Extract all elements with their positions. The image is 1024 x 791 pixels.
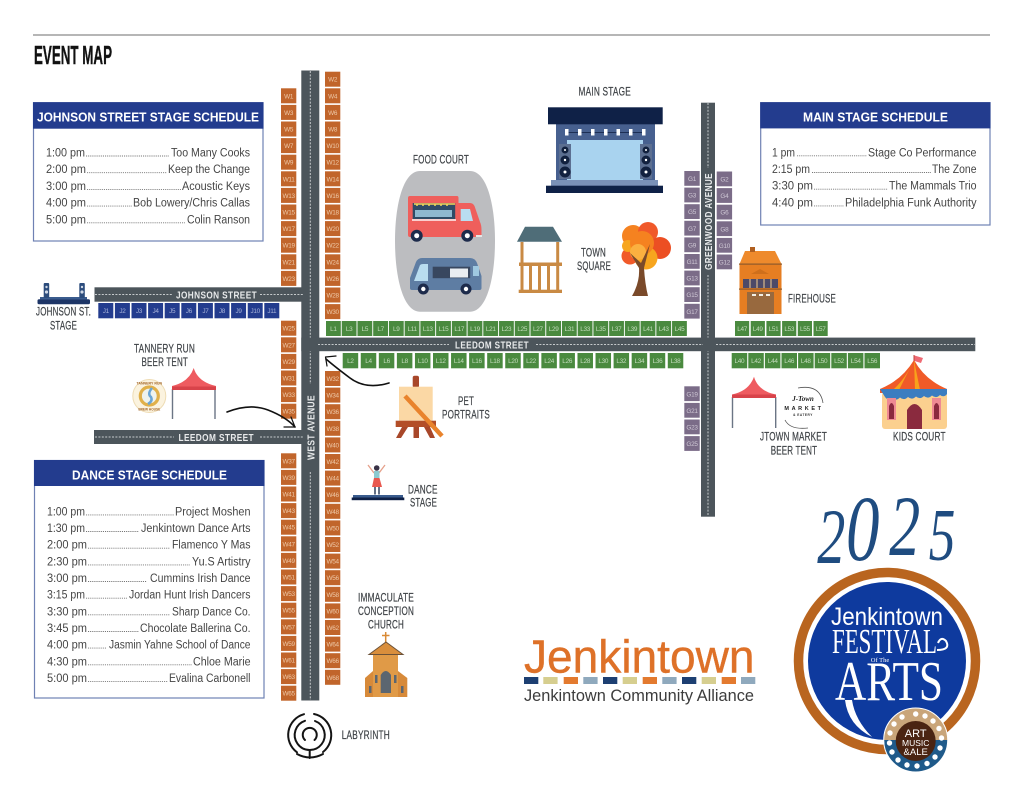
stalls: West Avenue W2 to W30: W10 <box>326 143 339 150</box>
icon: dancer on stage <box>352 465 404 500</box>
arrow: to pet portraits <box>326 356 389 386</box>
stalls: Leedom Street L1 to L45: L5 <box>362 326 369 333</box>
icon: red food truck <box>408 196 482 242</box>
icon: Tannery Run tent <box>172 368 216 419</box>
label: Dance stage <box>408 482 438 510</box>
stalls: West Avenue W32 to W68: W64 <box>326 642 339 649</box>
stalls: Leedom Street L1 to L45 <box>326 321 687 336</box>
stalls: Leedom Street L1 to L45: L15 <box>439 326 449 333</box>
road: West Avenue <box>301 70 319 700</box>
stalls: Leedom Street L2 to L38: L32 <box>616 358 627 365</box>
stalls: Leedom Street L1 to L45: L7 <box>377 326 385 333</box>
stalls: Leedom Street L47 to L57: L47 <box>737 326 748 333</box>
schedule rows: Keep the Change <box>168 164 250 176</box>
stalls: West Avenue W2 to W30: W14 <box>326 176 339 183</box>
icon: Tannery Run logo: TANNERY RUN <box>136 382 163 386</box>
stalls: Leedom Street L40 to L56: L50 <box>818 358 828 365</box>
schedule rows: Project Moshen <box>175 506 250 518</box>
stalls: Leedom Street L2 to L38: L8 <box>401 358 409 365</box>
schedule rows: Too Many Cooks <box>171 148 250 160</box>
stalls: Leedom Street L1 to L45: L29 <box>549 326 559 333</box>
schedule rows: Evalina Carbonell <box>169 673 250 685</box>
stalls: West Avenue W2 to W30 <box>325 72 340 319</box>
stalls: Johnson Street J1 to J11: J11 <box>267 308 277 315</box>
schedule rows: Chloe Marie <box>193 656 250 668</box>
label: Tannery Run beer tent: TANNERY RUN <box>134 342 195 356</box>
schedule rows: 5:00 pm <box>47 673 87 685</box>
stalls: Leedom Street L2 to L38: L2 <box>347 358 354 365</box>
stalls: West Avenue W37 to W65: W37 <box>282 458 295 465</box>
stalls: West Avenue W37 to W65: W63 <box>282 674 295 681</box>
stalls: Johnson Street J1 to J11: J7 <box>202 308 209 315</box>
stalls: West Avenue W37 to W65: W41 <box>282 491 295 498</box>
stalls: Leedom Street L40 to L56: L54 <box>851 358 861 365</box>
stalls: Leedom Street L2 to L38: L4 <box>365 358 372 365</box>
stalls: Leedom Street L2 to L38 <box>343 353 683 368</box>
stalls: West Avenue W25 to W35: W27 <box>282 342 295 349</box>
stalls: Leedom Street L1 to L45: L9 <box>393 326 400 333</box>
stalls: Greenwood G1 to G17: G1 <box>688 176 697 183</box>
stalls: West Avenue W2 to W30: W22 <box>326 243 339 250</box>
stalls: Johnson Street J1 to J11 <box>98 303 279 318</box>
road: Leedom Street west <box>94 430 303 444</box>
stalls: Greenwood G19 to G25: G19 <box>686 391 698 398</box>
stalls: Leedom Street L1 to L45: L35 <box>596 326 606 333</box>
schedule rows: Acoustic Keys <box>182 181 250 193</box>
icon: JTown tent <box>732 377 776 428</box>
label: Kids court: KIDS COURT <box>893 430 946 444</box>
schedule rows: 4:30 pm <box>47 656 87 668</box>
schedule rows: 4:00 pm <box>46 198 86 210</box>
schedule rows: Philadelphia Funk Authority <box>845 197 977 209</box>
icon: Tannery Run logo <box>133 380 166 412</box>
stalls: Greenwood G2 to G12: G12 <box>719 260 731 266</box>
road: Greenwood Avenue: GREENWOOD AVENUE <box>703 173 715 270</box>
label: Immaculate Conception Church <box>358 591 414 631</box>
label: Dance stage: DANCE <box>408 482 438 496</box>
heading: Johnson schedule: JOHNSON STREET STAGE SCHEDULE <box>37 110 259 124</box>
stalls: Leedom Street L1 to L45: L43 <box>659 326 669 333</box>
panel: Food court area <box>395 171 495 312</box>
stalls: West Avenue W1 to W23: W21 <box>282 259 295 266</box>
schedule rows: 2:15 pm <box>772 164 810 176</box>
stalls: West Avenue W37 to W65 <box>281 453 296 701</box>
schedule rows: Flamenco Y Mas <box>172 540 251 552</box>
label: Labyrinth: LABYRINTH <box>342 728 390 742</box>
stalls: Leedom Street L2 to L38: L26 <box>562 358 573 365</box>
logo: Jenkintown Festival of the Arts <box>798 572 976 772</box>
stalls: Leedom Street L1 to L45: L21 <box>486 326 496 333</box>
stalls: West Avenue W37 to W65: W57 <box>282 624 295 631</box>
icon: firehouse <box>739 247 782 314</box>
stalls: West Avenue W2 to W30: W30 <box>326 309 339 316</box>
schedule rows: The Zone <box>932 164 976 176</box>
year: 2025: 2 <box>817 493 845 580</box>
schedule rows: 3:30 pm <box>47 606 87 618</box>
title: EVENT MAP <box>34 40 112 70</box>
stalls: Johnson Street J1 to J11: J2 <box>119 308 126 315</box>
stalls: Leedom Street L1 to L45: L19 <box>470 326 481 333</box>
label: Tannery Run beer tent <box>134 342 195 369</box>
stalls: West Avenue W32 to W68: W50 <box>326 525 339 532</box>
schedule rows: 2:00 pm <box>47 540 87 552</box>
stalls: West Avenue W37 to W65: W53 <box>282 591 295 598</box>
icon: kids court circus tent <box>880 355 947 429</box>
stalls: Leedom Street L40 to L56: L52 <box>834 358 845 365</box>
year: 2025: 2 <box>889 479 920 575</box>
stalls: Leedom Street L47 to L57: L55 <box>800 326 811 333</box>
stalls: Johnson Street J1 to J11: J6 <box>186 308 193 315</box>
schedule rows: 3:45 pm <box>47 623 87 635</box>
schedule rows: The Mammals Trio <box>889 181 976 193</box>
icon: Johnson St. stage <box>38 283 90 304</box>
road: Johnson Street <box>94 287 303 302</box>
stalls: West Avenue W32 to W68: W52 <box>326 542 339 549</box>
stalls: Greenwood G19 to G25: G23 <box>686 424 698 431</box>
icon: church <box>365 632 407 697</box>
stalls: West Avenue W32 to W68: W54 <box>326 559 339 566</box>
stalls: West Avenue W32 to W68: W38 <box>326 426 339 433</box>
schedule rows: 1:00 pm <box>46 148 85 160</box>
label: Pet portraits: PET <box>458 394 474 408</box>
stalls: Leedom Street L2 to L38: L10 <box>418 358 428 365</box>
stalls: West Avenue W37 to W65: W47 <box>282 541 295 548</box>
road: Leedom Street: LEEDOM STREET <box>455 339 529 351</box>
stalls: West Avenue W2 to W30: W28 <box>326 292 339 300</box>
stalls: West Avenue W1 to W23: W7 <box>284 143 294 150</box>
label: Pet portraits: PORTRAITS <box>442 408 490 422</box>
label: Johnson St. stage: STAGE <box>50 318 77 332</box>
stalls: West Avenue W2 to W30: W6 <box>328 110 338 117</box>
schedule rows: Stage Co Performance <box>868 147 976 159</box>
stalls: West Avenue W1 to W23: W13 <box>282 193 295 200</box>
stalls: West Avenue W32 to W68: W56 <box>326 575 339 582</box>
stalls: West Avenue W1 to W23 <box>281 88 296 286</box>
schedule rows: 1:00 pm <box>47 506 85 518</box>
badge: art music and ale <box>884 708 948 772</box>
stalls: Greenwood G19 to G25 <box>684 386 700 451</box>
stalls: Leedom Street L2 to L38: L14 <box>454 358 464 365</box>
stalls: West Avenue W2 to W30: W2 <box>328 77 338 84</box>
stalls: Leedom Street L1 to L45: L37 <box>612 326 622 333</box>
stalls: Leedom Street L2 to L38: L20 <box>508 358 519 365</box>
label: Town square: SQUARE <box>577 259 611 273</box>
stalls: Greenwood G1 to G17: G7 <box>688 226 697 233</box>
schedule rows: 4:40 pm <box>772 197 813 209</box>
stalls: West Avenue W2 to W30: W26 <box>326 276 339 283</box>
stalls: Greenwood G2 to G12: G2 <box>720 176 729 184</box>
label: Johnson St. stage: JOHNSON ST. <box>36 305 91 319</box>
stalls: Leedom Street L40 to L56: L44 <box>768 358 778 365</box>
stalls: Leedom Street L2 to L38: L18 <box>490 358 501 365</box>
stalls: Johnson Street J1 to J11: J4 <box>153 308 159 315</box>
stalls: West Avenue W32 to W68 <box>325 371 340 685</box>
logo: Jenkintown Festival of the Arts: FESTIVAL <box>832 622 937 661</box>
schedule rows: Jenkintown Dance Arts <box>141 523 251 535</box>
label: Pet portraits <box>442 394 490 422</box>
schedule rows: Yu.S Artistry <box>192 556 251 568</box>
icon: J-Town Market logo: MARKET <box>784 406 824 412</box>
stalls: West Avenue W32 to W68: W36 <box>326 409 339 416</box>
label: Food court: FOOD COURT <box>413 152 469 166</box>
road: Leedom Street <box>301 338 975 351</box>
stalls: West Avenue W1 to W23: W15 <box>282 210 295 216</box>
logo: Jenkintown Festival of the Arts: ARTS <box>835 651 943 713</box>
stalls: Leedom Street L2 to L38: L22 <box>526 358 537 365</box>
stalls: Johnson Street J1 to J11: J3 <box>136 308 143 315</box>
icon: J-Town Market logo: J-Town <box>791 395 814 403</box>
stalls: Leedom Street L2 to L38: L30 <box>598 358 609 365</box>
stalls: Leedom Street L2 to L38: L36 <box>653 358 663 365</box>
schedule rows <box>772 147 977 209</box>
stalls: West Avenue W1 to W23: W1 <box>284 93 294 100</box>
colored square strip <box>524 677 755 684</box>
stalls: West Avenue W2 to W30: W24 <box>326 259 339 266</box>
stalls: Leedom Street L40 to L56 <box>732 353 880 368</box>
schedule rows: 3:15 pm <box>47 590 85 602</box>
stalls: West Avenue W25 to W35: W35 <box>282 409 295 416</box>
badge: art music and ale: MUSIC <box>902 738 929 748</box>
stalls: West Avenue W37 to W65: W49 <box>282 558 295 565</box>
label: JTown Market beer tent: BEER TENT <box>771 443 817 457</box>
stalls: Leedom Street L2 to L38: L38 <box>671 358 681 365</box>
label: Tannery Run beer tent: BEER TENT <box>142 355 188 369</box>
stalls: Leedom Street L40 to L56: L42 <box>751 358 762 365</box>
stalls: Leedom Street L1 to L45: L25 <box>517 326 528 333</box>
stalls: West Avenue W32 to W68: W66 <box>326 658 339 665</box>
label: Dance stage: STAGE <box>410 496 437 510</box>
stalls: West Avenue W2 to W30: W12 <box>326 160 339 167</box>
stalls: Leedom Street L2 to L38: L12 <box>436 358 446 365</box>
stalls: West Avenue W32 to W68: W62 <box>326 625 339 632</box>
stalls: Greenwood G1 to G17: G3 <box>688 193 697 200</box>
stalls: Johnson Street J1 to J11: J10 <box>250 308 261 315</box>
stalls: Greenwood G1 to G17 <box>684 171 700 319</box>
heading: Dance schedule: DANCE STAGE SCHEDULE <box>72 468 227 482</box>
stalls: West Avenue W37 to W65: W51 <box>282 574 295 581</box>
road: Johnson Street: JOHNSON STREET <box>176 289 257 301</box>
label: Main stage: MAIN STAGE <box>578 85 631 99</box>
schedule rows: Colin Ranson <box>187 214 250 226</box>
stalls: Leedom Street L2 to L38: L6 <box>383 358 391 365</box>
schedule rows: 1:30 pm <box>47 523 85 535</box>
stalls: West Avenue W37 to W65: W55 <box>282 608 295 615</box>
stalls: Greenwood G1 to G17: G9 <box>688 242 697 249</box>
stalls: Greenwood G19 to G25: G21 <box>686 408 698 415</box>
stalls: Leedom Street L2 to L38: L16 <box>472 358 483 365</box>
label: JTown Market beer tent: JTOWN MARKET <box>760 430 827 444</box>
icon: main stage <box>546 107 663 193</box>
stalls: Leedom Street L40 to L56: L46 <box>784 358 795 365</box>
schedule rows: Jasmin Yahne School of Dance <box>109 640 250 652</box>
road: West Avenue: WEST AVENUE <box>305 395 317 460</box>
stalls: West Avenue W37 to W65: W43 <box>282 508 295 515</box>
stalls: Leedom Street L47 to L57: L49 <box>753 326 763 333</box>
stalls: Greenwood G19 to G25: G25 <box>686 441 698 448</box>
icon: J-Town Market logo: & EATERY <box>793 413 813 417</box>
label: Town square <box>577 246 611 273</box>
heading: Main schedule: MAIN STAGE SCHEDULE <box>803 110 948 124</box>
year: 2025: 5 <box>929 495 955 576</box>
stalls: West Avenue W1 to W23: W17 <box>282 226 295 233</box>
schedule rows: 3:30 pm <box>772 181 813 193</box>
schedule rows: 5:00 pm <box>46 214 86 226</box>
stalls: West Avenue W1 to W23: W23 <box>282 276 295 283</box>
stalls: West Avenue W2 to W30: W16 <box>326 193 339 200</box>
schedule rows: Jordan Hunt Irish Dancers <box>129 590 251 602</box>
stalls: West Avenue W37 to W65: W39 <box>282 475 295 482</box>
arrow: to Leedom Street <box>227 407 295 427</box>
stalls: Leedom Street L1 to L45: L13 <box>423 326 433 333</box>
stalls: West Avenue W32 to W68: W58 <box>326 592 339 599</box>
stalls: West Avenue W1 to W23: W5 <box>284 127 294 134</box>
stalls: Leedom Street L47 to L57 <box>735 321 828 336</box>
stalls: West Avenue W2 to W30: W20 <box>326 226 339 233</box>
stalls: Greenwood G2 to G12 <box>717 172 732 269</box>
stalls: Greenwood G2 to G12: G8 <box>720 226 729 233</box>
icon: easel and pencil <box>396 376 442 438</box>
label: Immaculate Conception Church: IMMACULATE <box>358 591 414 605</box>
road: Greenwood Avenue <box>701 103 715 517</box>
label: Town square: TOWN <box>581 246 606 260</box>
label: Johnson St. stage <box>36 305 91 332</box>
stalls: Leedom Street L1 to L45: L11 <box>407 326 417 333</box>
stalls: Leedom Street L40 to L56: L48 <box>801 358 811 365</box>
panel: Main stage schedule <box>760 102 990 225</box>
label: Immaculate Conception Church: CHURCH <box>368 617 404 631</box>
stalls: Leedom Street L1 to L45: L1 <box>330 326 337 333</box>
stalls: West Avenue W25 to W35: W31 <box>282 376 295 383</box>
stalls: Leedom Street L2 to L38: L28 <box>580 358 591 365</box>
label: Immaculate Conception Church: CONCEPTION <box>358 604 414 618</box>
stalls: Leedom Street L1 to L45: L39 <box>627 326 638 333</box>
stalls: West Avenue W2 to W30: W18 <box>326 210 339 216</box>
schedule rows: Cummins Irish Dance <box>150 573 250 585</box>
stalls: Johnson Street J1 to J11: J8 <box>219 308 226 315</box>
stalls: West Avenue W1 to W23: W9 <box>284 160 294 167</box>
stalls: Johnson Street J1 to J11: J1 <box>103 308 110 315</box>
stalls: Leedom Street L40 to L56: L40 <box>735 358 745 365</box>
stalls: West Avenue W25 to W35 <box>281 321 296 419</box>
schedule rows: 3:00 pm <box>46 181 86 193</box>
stalls: West Avenue W32 to W68: W32 <box>326 376 339 383</box>
stalls: Leedom Street L1 to L45: L41 <box>643 326 654 333</box>
schedule rows: 2:00 pm <box>46 164 86 176</box>
stalls: Leedom Street L1 to L45: L27 <box>533 326 544 333</box>
schedule rows: 2:30 pm <box>47 556 87 568</box>
stalls: Johnson Street J1 to J11: J9 <box>236 308 242 315</box>
stalls: Leedom Street L1 to L45: L33 <box>580 326 591 333</box>
badge: art music and ale: &ALE <box>904 747 928 758</box>
icon: labyrinth <box>288 714 331 758</box>
stalls: Greenwood G1 to G17: G17 <box>686 309 698 316</box>
stalls: West Avenue W2 to W30: W8 <box>328 126 338 133</box>
schedule rows: 1 pm <box>772 147 795 159</box>
stalls: Leedom Street L40 to L56: L56 <box>867 358 878 365</box>
logo: Jenkintown Community Alliance <box>524 630 755 705</box>
badge: art music and ale: ART <box>905 728 927 740</box>
stalls: West Avenue W37 to W65: W45 <box>282 525 295 532</box>
icon: J-Town Market logo <box>784 387 824 428</box>
schedule rows: 3:00 pm <box>47 573 87 585</box>
stalls: West Avenue W25 to W35: W33 <box>282 392 295 399</box>
stalls: Greenwood G2 to G12: G10 <box>719 243 731 250</box>
stalls: Greenwood G2 to G12: G4 <box>720 193 729 200</box>
stalls: Leedom Street L1 to L45: L17 <box>454 326 465 333</box>
logo: Jenkintown Community Alliance: Jenkintown Community Alliance <box>524 686 754 705</box>
label: JTown Market beer tent <box>760 430 827 457</box>
year: 2025: 0 <box>846 477 879 581</box>
panel: Dance stage schedule <box>34 460 264 698</box>
stalls: Leedom Street L1 to L45: L23 <box>502 326 512 333</box>
stalls: Greenwood G1 to G17: G13 <box>686 276 698 283</box>
stalls: Leedom Street L1 to L45: L3 <box>346 326 353 333</box>
stalls: Leedom Street L2 to L38: L34 <box>635 358 645 365</box>
stalls: Greenwood G2 to G12: G6 <box>720 210 729 217</box>
stalls: West Avenue W25 to W35: W25 <box>282 326 295 333</box>
stalls: West Avenue W32 to W68: W40 <box>326 442 339 449</box>
stalls: West Avenue W32 to W68: W44 <box>326 476 339 483</box>
stalls: West Avenue W37 to W65: W59 <box>282 641 295 648</box>
stalls: West Avenue W32 to W68: W34 <box>326 393 339 400</box>
stalls: Johnson Street J1 to J11: J5 <box>169 308 176 315</box>
stalls: West Avenue W32 to W68: W68 <box>326 675 339 682</box>
stalls: Leedom Street L47 to L57: L57 <box>816 326 826 333</box>
schedule rows: Bob Lowery/Chris Callas <box>133 198 250 210</box>
stalls: West Avenue W32 to W68: W60 <box>326 608 339 615</box>
icon: town square gazebo <box>517 227 562 293</box>
stalls: West Avenue W1 to W23: W3 <box>284 110 294 117</box>
icon: Tannery Run logo: BREW HOUSE <box>138 408 160 412</box>
schedule rows: Sharp Dance Co. <box>172 606 250 618</box>
label: Firehouse: FIREHOUSE <box>788 291 836 305</box>
stalls: West Avenue W32 to W68: W42 <box>326 459 339 466</box>
stalls: Greenwood G1 to G17: G15 <box>686 292 698 299</box>
logo: Jenkintown Community Alliance: Jenkintown <box>524 630 754 682</box>
stalls: West Avenue W1 to W23: W11 <box>283 176 295 183</box>
stalls: West Avenue W2 to W30: W4 <box>328 93 338 100</box>
stalls: Greenwood G1 to G17: G5 <box>688 209 697 216</box>
icon: blue food van <box>410 258 482 294</box>
stalls: Leedom Street L47 to L57: L53 <box>784 326 795 333</box>
stalls: West Avenue W1 to W23: W19 <box>282 243 295 250</box>
stalls: West Avenue W25 to W35: W29 <box>282 359 295 366</box>
stalls: West Avenue W32 to W68: W48 <box>326 509 339 516</box>
schedule rows: Chocolate Ballerina Co. <box>140 623 250 635</box>
stalls: West Avenue W32 to W68: W46 <box>326 492 339 499</box>
schedule rows: 4:00 pm <box>47 640 87 652</box>
stalls: Greenwood G1 to G17: G11 <box>687 259 698 266</box>
logo: Jenkintown Festival of the Arts: Jenkintown <box>831 603 943 631</box>
schedule rows <box>47 506 251 685</box>
stalls: Leedom Street L1 to L45: L45 <box>675 326 685 333</box>
stalls: West Avenue W37 to W65: W65 <box>282 691 295 698</box>
schedule rows <box>46 148 250 226</box>
icon: autumn tree <box>622 222 671 296</box>
road: Leedom Street west: LEEDOM STREET <box>178 432 254 444</box>
stalls: Leedom Street L2 to L38: L24 <box>544 358 555 365</box>
stalls: Leedom Street L1 to L45: L31 <box>565 326 575 333</box>
stalls: West Avenue W37 to W65: W61 <box>282 657 295 664</box>
logo: Jenkintown Festival of the Arts: Of The <box>871 657 889 664</box>
stalls: Leedom Street L47 to L57: L51 <box>769 326 779 333</box>
panel: Johnson Street stage schedule <box>33 102 264 241</box>
